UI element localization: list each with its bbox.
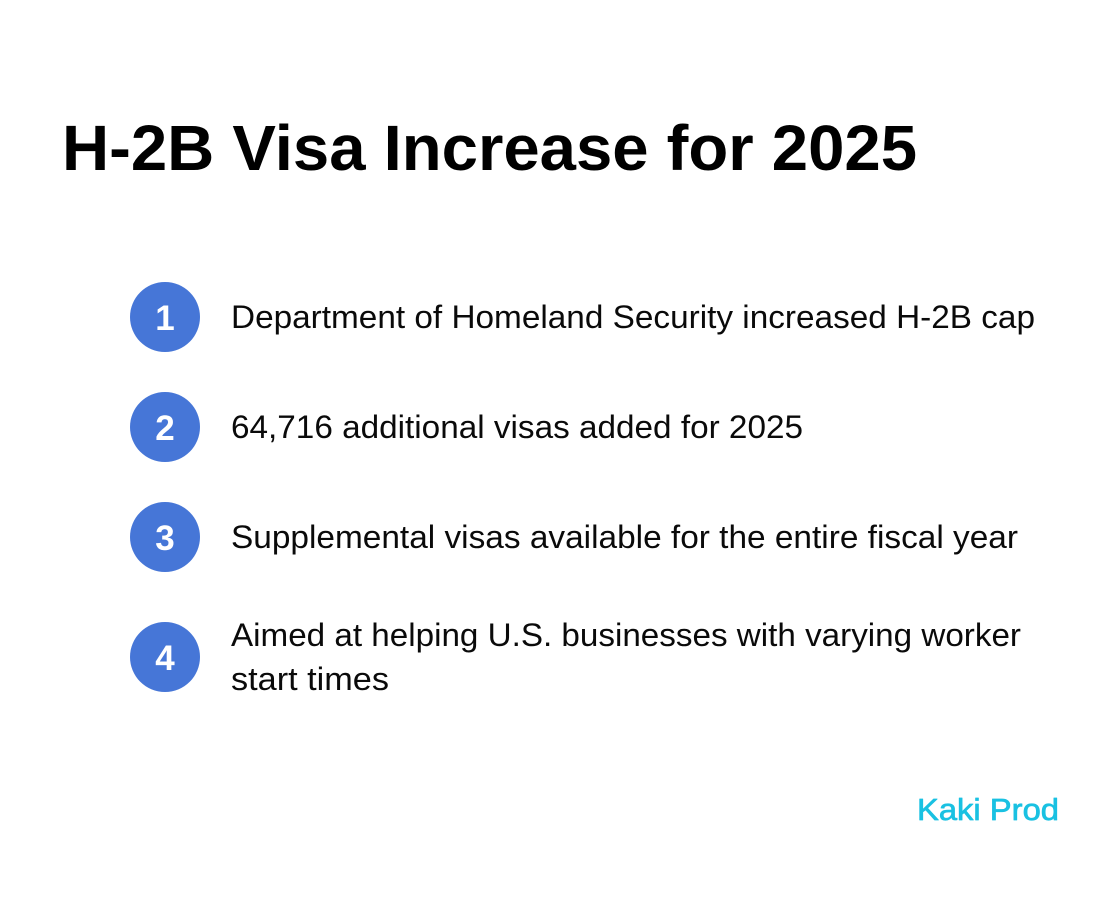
number badge 2 <box>130 392 200 462</box>
number badge 4: 4 <box>155 639 175 678</box>
item 1 text: Department of Homeland Security increased H-2B cap <box>231 299 1035 335</box>
item 3 text: Supplemental visas available for the entire fiscal year <box>231 519 1018 555</box>
number badge 4 <box>130 622 200 692</box>
list item 2 <box>130 392 803 462</box>
item 2 text: 64,716 additional visas added for 2025 <box>231 409 803 445</box>
number badge 2: 2 <box>155 409 175 448</box>
number badge 1 <box>130 282 200 352</box>
number badge 1: 1 <box>155 299 175 338</box>
number badge 3: 3 <box>155 519 175 558</box>
item 4 text: Aimed at helping U.S. businesses with varying worker <box>231 617 1021 653</box>
list item 1 <box>130 282 1035 352</box>
list item 3 <box>130 502 1018 572</box>
title: H-2B Visa Increase for 2025 <box>62 112 917 184</box>
item 4 text <box>231 617 1021 697</box>
logo: Kaki Prod: Kaki Prod <box>917 792 1059 827</box>
number badge 3 <box>130 502 200 572</box>
list item 4 <box>130 617 1021 697</box>
item 4 text: start times <box>231 661 389 697</box>
